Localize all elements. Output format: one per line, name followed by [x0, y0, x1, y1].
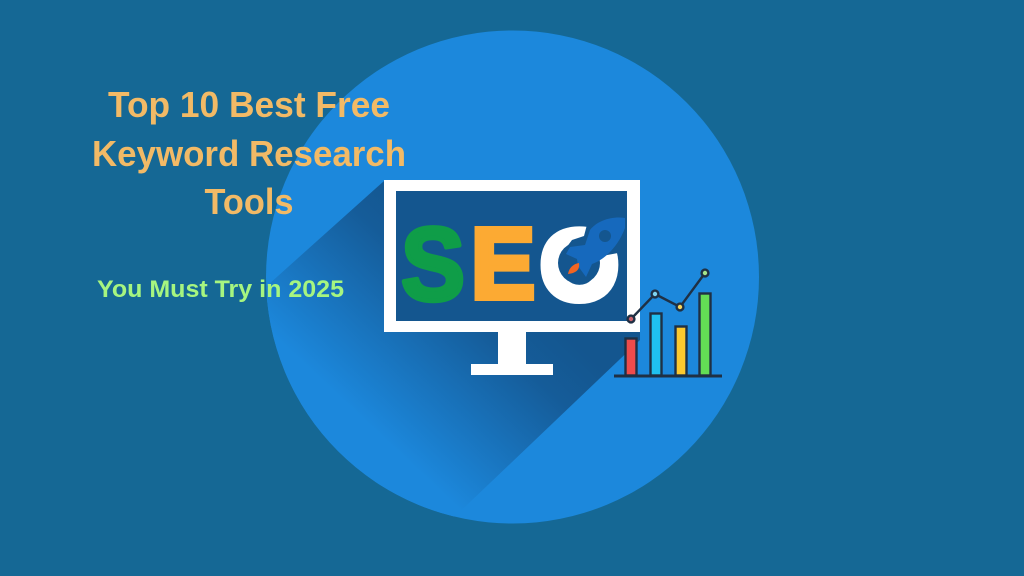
rocket body: [566, 218, 625, 277]
monitor: [384, 180, 640, 375]
yellow bar: [676, 326, 686, 376]
bar chart: [614, 270, 722, 376]
letter S: S: [401, 207, 465, 323]
icon: rocket: [558, 214, 627, 284]
letter E: E: [471, 208, 535, 320]
SEO wordmark: [401, 207, 618, 323]
title: Top 10 Best Free: [108, 84, 390, 125]
monitor screen: [396, 191, 627, 321]
blue bar: [650, 314, 662, 376]
subtitle: You Must Try in 2025: [97, 276, 344, 303]
letter O: O: [540, 210, 618, 320]
monitor stand: [471, 331, 553, 375]
rocket cut-out in the letter O: [560, 214, 627, 256]
rocket flame: [568, 263, 579, 274]
title: Keyword Research: [92, 133, 406, 174]
blue circle: [266, 30, 759, 524]
title: Tools: [204, 181, 294, 222]
rocket window: [599, 230, 611, 242]
letter O counter: [558, 242, 600, 284]
red bar: [626, 338, 636, 376]
trend points: [628, 316, 634, 322]
trend line: [631, 273, 705, 319]
green bar: [700, 294, 710, 376]
monitor long shadow: [266, 181, 640, 516]
monitor frame: [384, 180, 640, 332]
title: [92, 84, 406, 222]
axis: [614, 374, 722, 378]
